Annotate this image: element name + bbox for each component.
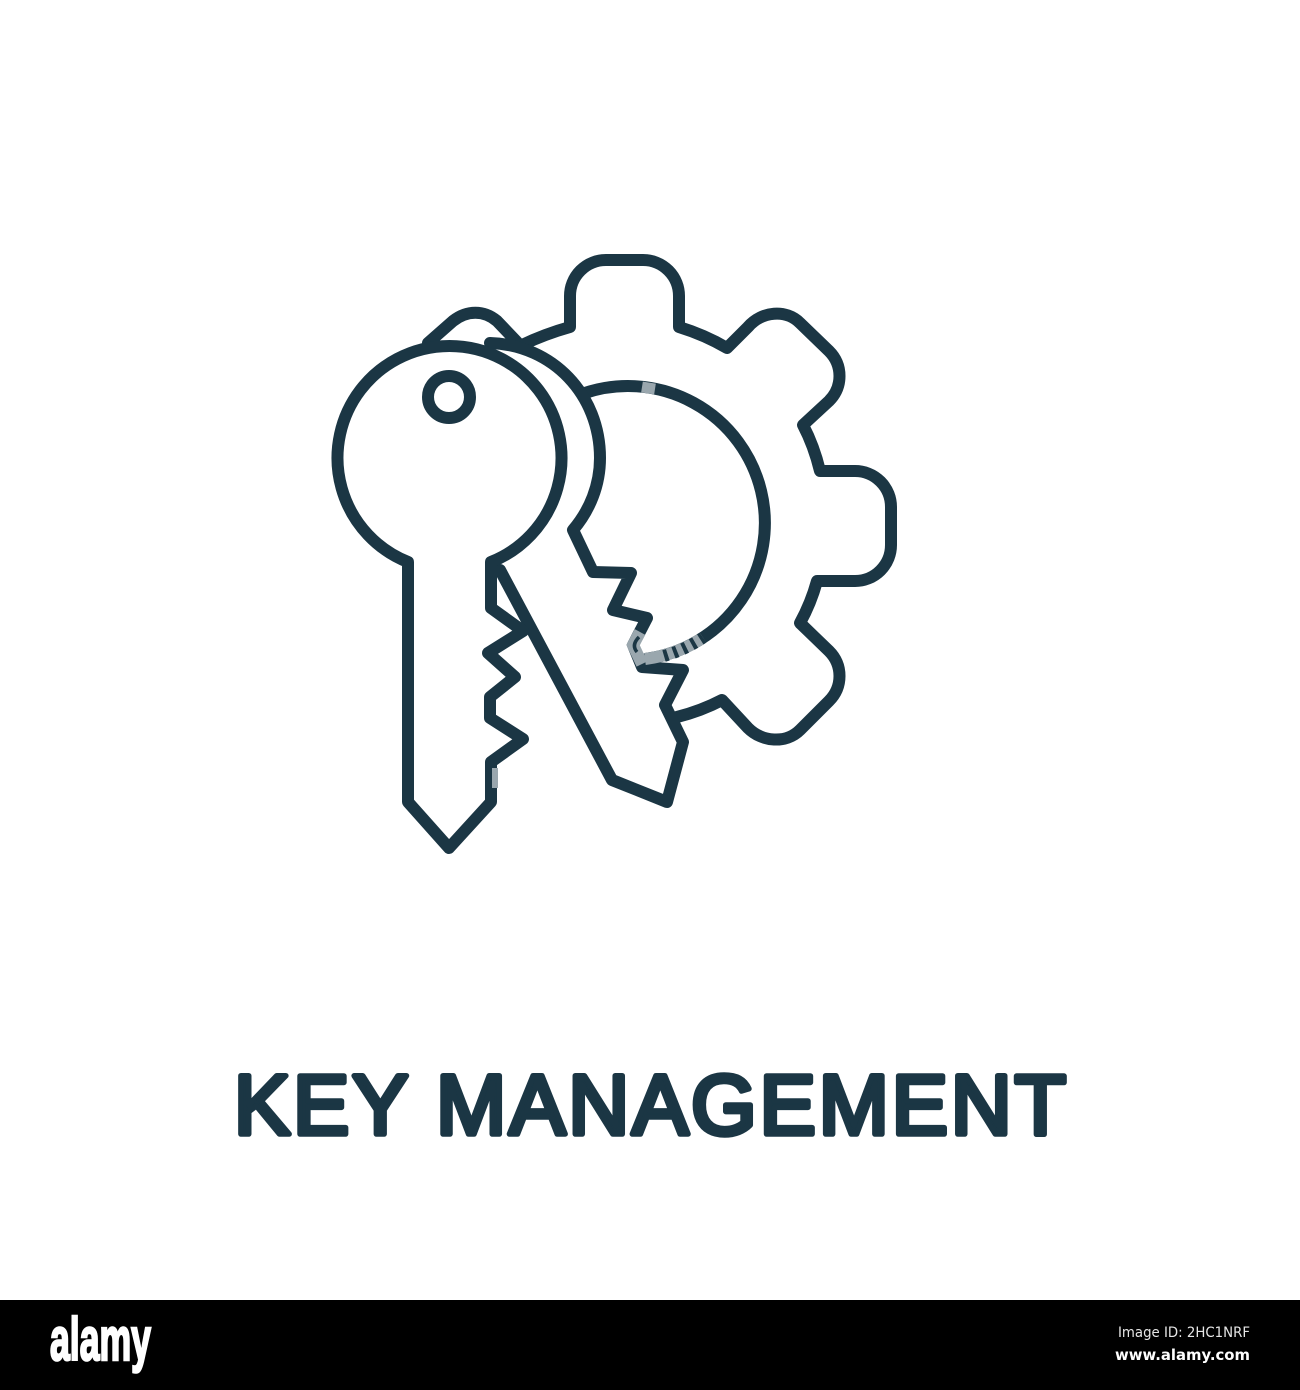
footer bar (0, 1300, 1300, 1390)
icon: back key (490, 343, 683, 802)
icon: gear outline (522, 260, 891, 740)
icon: front key (338, 346, 562, 848)
icon: keys and gear (338, 260, 891, 848)
icon: key ring (428, 313, 517, 343)
icon: key hole (428, 376, 470, 418)
website: www.alamy.com (1115, 1346, 1250, 1364)
image id: Image ID: 2HC1NRF (1118, 1325, 1250, 1341)
icon: gear inner circle (583, 386, 765, 659)
watermark remnants on the line art (495, 387, 703, 788)
logo: alamy: alamy (50, 1306, 151, 1373)
title: KEY MANAGEMENT (234, 1058, 1069, 1152)
